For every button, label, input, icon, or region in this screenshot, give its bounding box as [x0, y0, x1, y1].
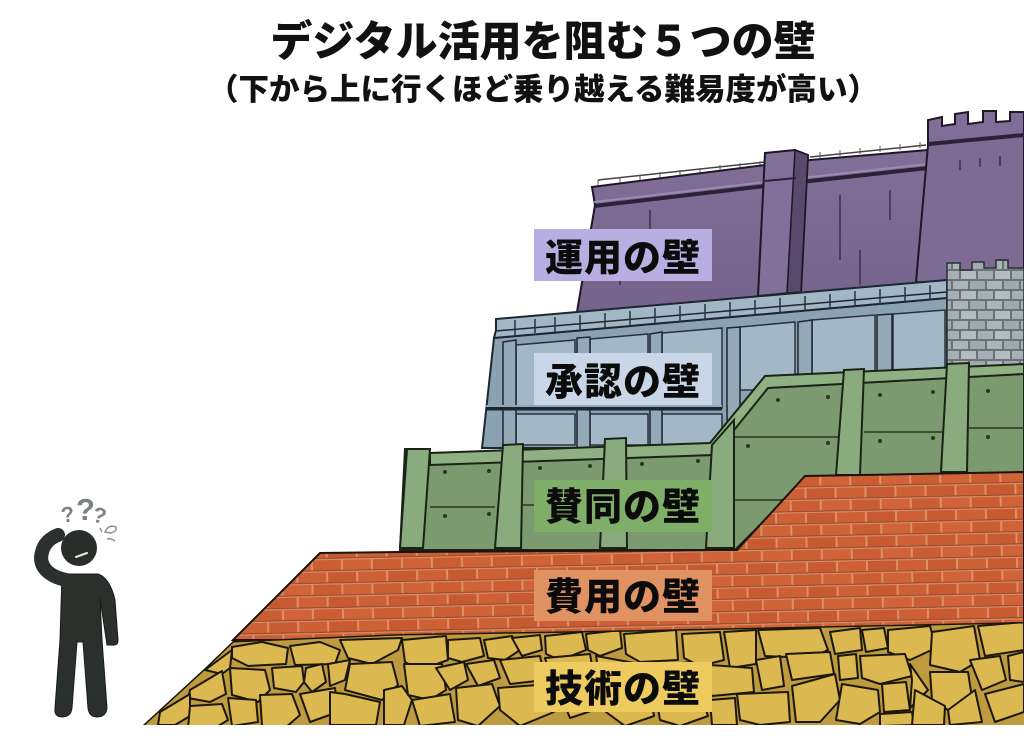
person scratching head	[41, 526, 118, 717]
label: 運用の壁: 運用の壁	[545, 238, 701, 280]
icon: question marks: ?	[90, 502, 109, 529]
wall 3: green concrete wall (賛同の壁)	[400, 363, 1024, 550]
label: 技術の壁: 技術の壁	[545, 669, 701, 711]
wall 4: blue-grey steel wall (承認の壁)	[482, 260, 1024, 448]
wall 1: yellow stone wall (技術の壁)	[143, 622, 1024, 728]
icon: question marks: ?	[59, 501, 76, 528]
title: デジタル活用を阻む５つの壁	[270, 18, 816, 65]
icon: question marks: ?	[76, 492, 95, 527]
label: 費用の壁: 費用の壁	[545, 577, 701, 619]
wall 5: purple fortress (運用の壁)	[577, 111, 1024, 312]
illustration: five stacked walls and person	[34, 110, 1024, 725]
icon: question marks	[59, 492, 109, 529]
subtitle: （下から上に行くほど乗り越える難易度が高い）	[208, 73, 878, 107]
label: 賛同の壁: 賛同の壁	[545, 487, 701, 529]
wall 2: orange brick wall (費用の壁)	[233, 472, 1024, 640]
label: 承認の壁: 承認の壁	[545, 362, 701, 404]
